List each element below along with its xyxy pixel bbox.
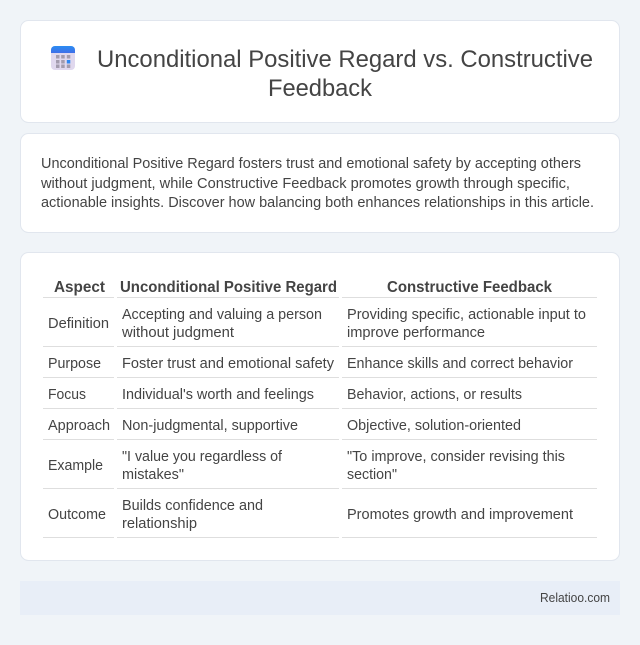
panel: comparison table	[20, 252, 620, 560]
row: approach: Approach	[48, 418, 110, 434]
row: example: "I value you regardless of	[122, 449, 283, 465]
table row lines	[43, 298, 597, 538]
row: focus: Individual's worth and feelings	[122, 387, 314, 403]
table header: Constructive Feedback	[387, 279, 552, 296]
row: outcome: Builds confidence and	[122, 498, 263, 514]
table header	[54, 279, 552, 296]
row: approach: Non-judgmental, supportive	[122, 418, 298, 434]
title text: Unconditional Positive Regard vs. Constructive	[97, 46, 593, 73]
row: focus	[48, 387, 522, 403]
row: example: "To improve, consider revising this	[347, 449, 565, 465]
row: definition: without judgment	[121, 325, 234, 341]
table header: Aspect	[54, 279, 106, 296]
title text: Feedback	[268, 75, 373, 102]
row: purpose: Foster trust and emotional safety	[122, 356, 335, 372]
intro text	[40, 156, 594, 211]
row: focus: Focus	[48, 387, 86, 403]
row: example: section"	[347, 467, 397, 483]
row: purpose: Purpose	[48, 356, 101, 372]
row: definition: Definition	[48, 316, 109, 332]
row: outcome	[48, 498, 573, 532]
table header: Unconditional Positive Regard	[120, 279, 337, 296]
intro text: Unconditional Positive Regard fosters trust and emotional safety by accepting others	[41, 156, 581, 172]
intro text: without judgment, while Constructive Feedback promotes growth through specific,	[40, 176, 570, 192]
row: approach	[48, 418, 521, 434]
row: definition: improve performance	[347, 325, 485, 341]
footer bar	[20, 581, 620, 615]
panel: title	[20, 20, 620, 122]
row: definition: Accepting and valuing a person	[122, 307, 322, 323]
footer text: Relatioo.com	[540, 591, 610, 605]
row: example: Example	[48, 458, 103, 474]
row: outcome: Promotes growth and improvement	[347, 507, 573, 523]
row: outcome: Outcome	[48, 507, 106, 523]
row: approach: Objective, solution-oriented	[347, 418, 521, 434]
row: purpose	[48, 356, 573, 372]
row: definition: Providing specific, actionable input to	[347, 307, 586, 323]
row: outcome: relationship	[122, 516, 197, 532]
title text	[97, 46, 593, 102]
row: example	[48, 449, 565, 483]
row: purpose: Enhance skills and correct behavior	[347, 356, 573, 372]
intro text: actionable insights. Discover how balancing both enhances relationships in this article.	[41, 195, 594, 211]
row: example: mistakes"	[122, 467, 184, 483]
icon: calendar	[51, 46, 75, 70]
row: definition	[48, 307, 586, 341]
panel: introduction	[20, 134, 620, 232]
row: focus: Behavior, actions, or results	[347, 387, 522, 403]
